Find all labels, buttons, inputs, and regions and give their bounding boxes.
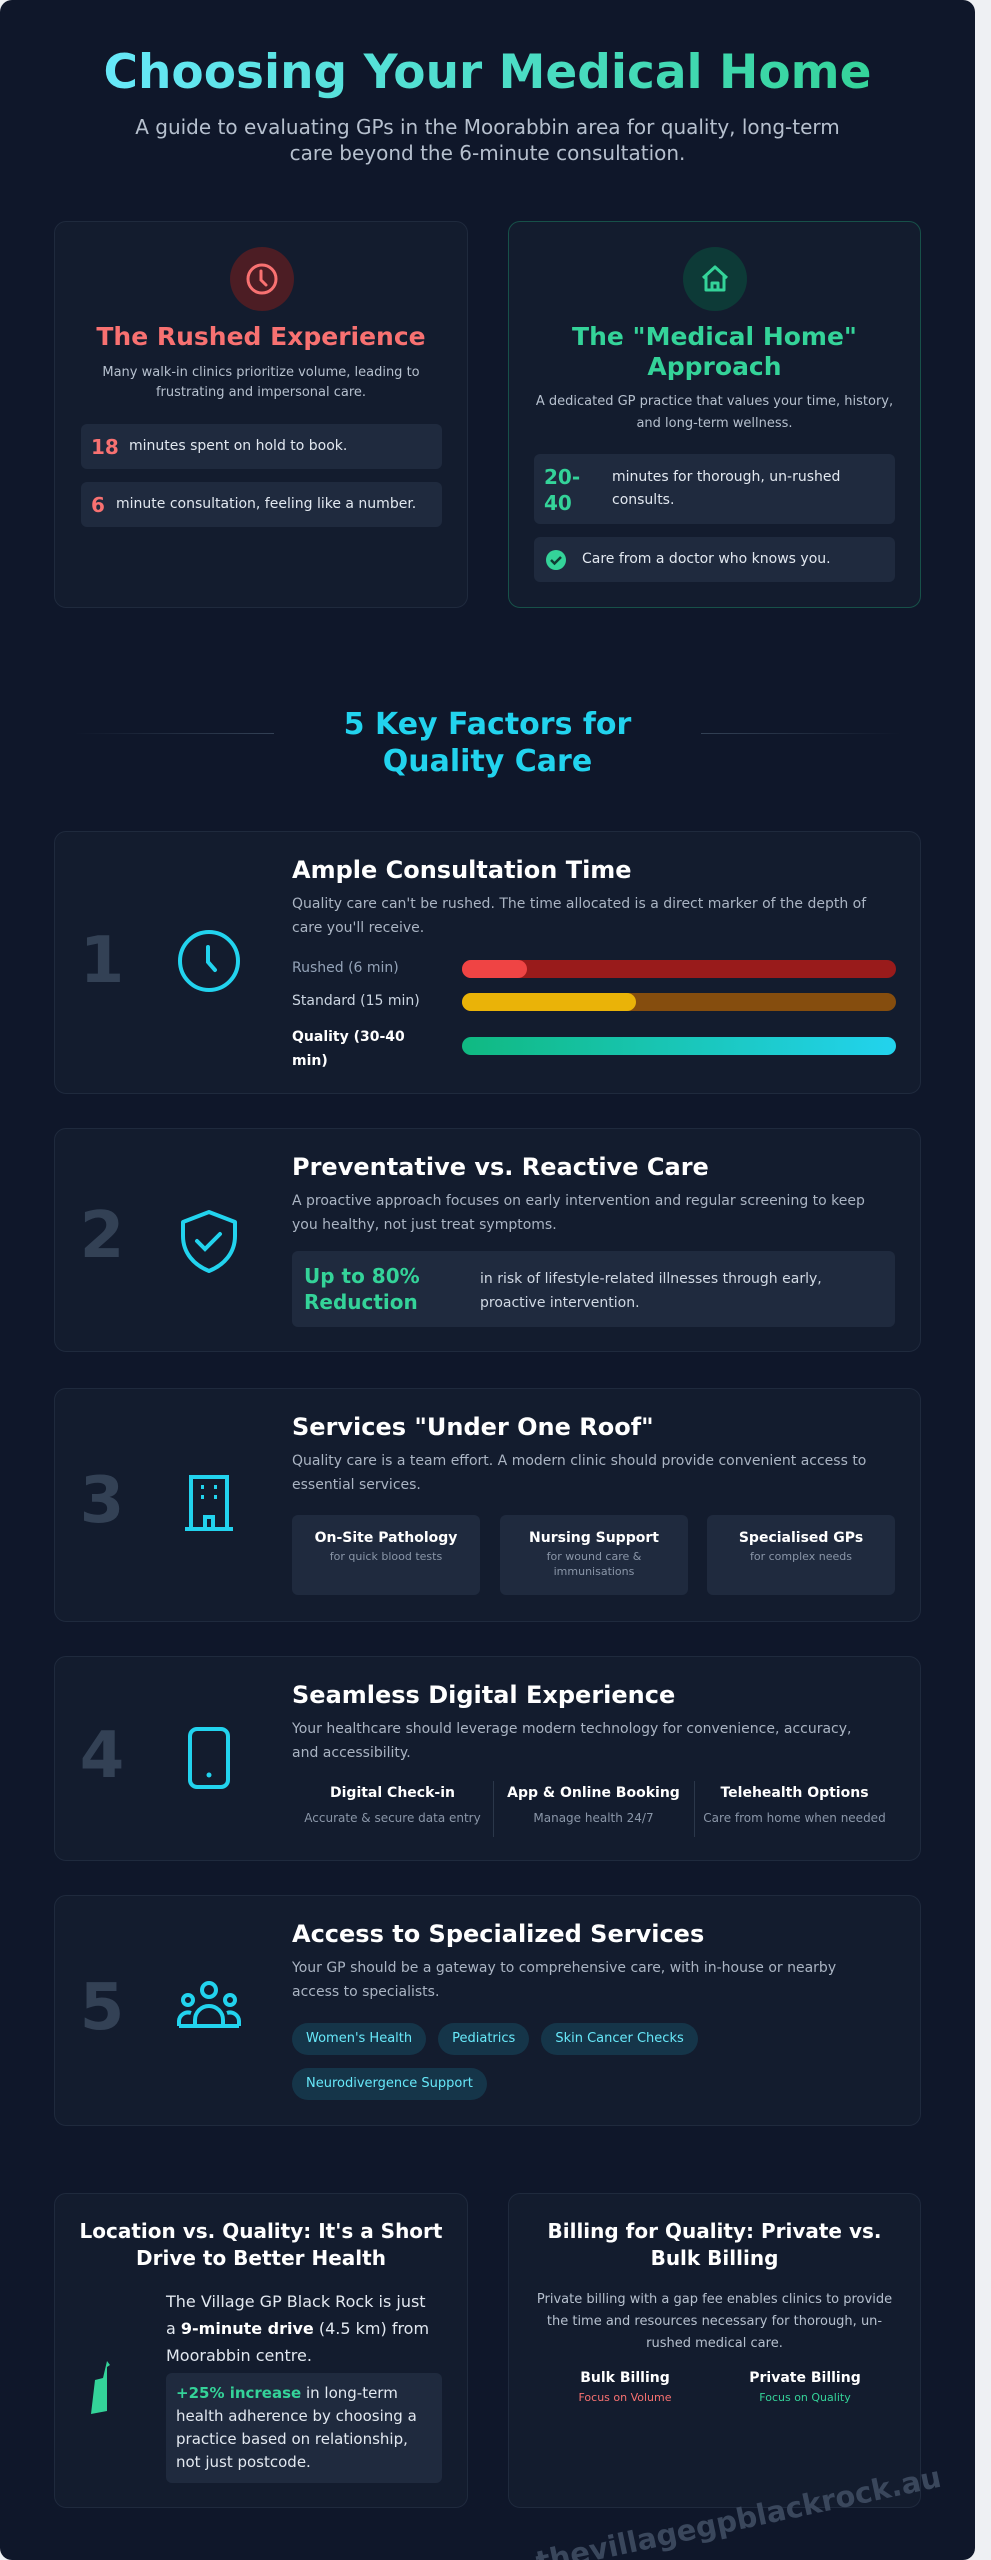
stat: 18 minutes: minutes spent on hold to book.: [129, 438, 347, 454]
title: Services "Under One Roof": [292, 1413, 654, 1441]
icon: people: [177, 1981, 241, 2028]
heading: Approach: [647, 352, 782, 381]
icon: green marker: [91, 2361, 110, 2414]
title: Access to Specialized Services: [292, 1920, 704, 1948]
bar chart: Quality (30-40 min): [292, 1029, 405, 1069]
heading: Location vs. Quality: It's a Short Drive to Better Health: [80, 2219, 442, 2270]
bar chart: Rushed (6 min): [292, 960, 399, 976]
bulk billing: Bulk Billing: [580, 2370, 670, 2386]
stat: 20-40: 40: [544, 491, 572, 515]
panel: factor 2: [54, 1128, 921, 1352]
tags: Pediatrics: [452, 2031, 515, 2046]
stat: 20-40: 20-: [544, 465, 580, 489]
panel: location vs quality: [54, 2193, 468, 2508]
title: Choosing Your Medical Home: [103, 45, 872, 100]
section heading: 5 key factors: Quality Care: [383, 744, 592, 779]
service: pathology: [292, 1515, 480, 1595]
service: specialised GPs: [707, 1515, 895, 1595]
stat: 18 minutes: [81, 424, 442, 469]
title: Preventative vs. Reactive Care: [292, 1153, 709, 1181]
stat: 6 minute: minute consultation, feeling like a number.: [116, 496, 416, 512]
description: Quality care is a team effort. A modern clinic should provide convenient access to essential services.: [292, 1453, 866, 1493]
section heading: 5 key factors: [112, 707, 863, 779]
text: Private billing with a gap fee enables clinics to provide the time and resources necessary for thorough, un-rushed medical care.: [537, 2292, 892, 2351]
heading: The "Medical Home": [572, 322, 857, 351]
bar chart: Standard (15 min): [292, 993, 420, 1009]
icon: building: [185, 1475, 233, 1531]
heading: [572, 322, 857, 381]
callout: [166, 2373, 442, 2483]
stat: 6 minute: [81, 482, 442, 527]
stat box: 80% reduction: Up to 80%: [304, 1264, 420, 1288]
description: Your healthcare should leverage modern technology for convenience, accuracy, and accessibility.: [292, 1721, 852, 1761]
callout: +25% increase in long-term health adherence by choosing a practice based on relationship, not just postcode.: [176, 2384, 417, 2471]
number 4: 4: [80, 1719, 124, 1793]
icon: clock red: [230, 247, 294, 311]
number 5: 5: [80, 1971, 124, 2045]
digital features: [304, 1781, 886, 1837]
subtitle: A guide to evaluating GPs in the Moorabbin area for quality, long-term care beyond the 6-minute consultation.: [135, 115, 840, 165]
private billing: Private Billing: [749, 2370, 861, 2386]
service: specialised GPs: Specialised GPs: [739, 1530, 863, 1546]
stat: 20-40: minutes for thorough, un-rushed consults.: [612, 469, 840, 508]
stat: 20-40: [534, 454, 895, 524]
panel: medical home: [508, 221, 921, 608]
icon: clock: [178, 930, 240, 992]
tags: Skin Cancer Checks: [555, 2031, 684, 2046]
digital features: App & Online Booking: [507, 1785, 680, 1801]
stat: check: Care from a doctor who knows you.: [582, 551, 831, 567]
icon: house: [683, 247, 747, 311]
service: nursing: for wound care &: [547, 1550, 641, 1563]
text: The Village GP Black Rock is just a 9-minute drive (4.5 km) from Moorabbin centre.: [166, 2292, 429, 2365]
panel: rushed experience: [54, 221, 468, 608]
title: Seamless Digital Experience: [292, 1681, 675, 1709]
description: Quality care can't be rushed. The time allocated is a direct marker of the depth of care you'll receive.: [292, 896, 866, 936]
text: Many walk-in clinics prioritize volume, leading to frustrating and impersonal care.: [102, 365, 420, 400]
stat: 18 minutes: 18: [91, 435, 119, 459]
heading: The Rushed Experience: [96, 322, 426, 351]
digital features: Accurate & secure data entry: [304, 1811, 481, 1825]
bar chart: [292, 960, 896, 1069]
panel: factor 3: [54, 1388, 921, 1622]
stat box: 80% reduction: [292, 1251, 895, 1327]
bulk billing: Focus on Volume: [578, 2391, 672, 2404]
number 2: 2: [80, 1199, 124, 1273]
panel: factor 1: [54, 831, 921, 1094]
number 1: 1: [80, 924, 124, 998]
description: Your GP should be a gateway to comprehensive care, with in-house or nearby access to specialists.: [292, 1960, 836, 2000]
heading: Billing for Quality: Private vs. Bulk Billing: [548, 2219, 882, 2270]
tags: Women's Health: [306, 2031, 412, 2046]
bulk billing: [578, 2370, 672, 2404]
panel: billing: [508, 2193, 921, 2508]
section heading: 5 key factors: 5 Key Factors for: [344, 707, 631, 742]
digital features: Manage health 24/7: [533, 1811, 654, 1825]
stat box: 80% reduction: in risk of lifestyle-related illnesses through early, proactive intervention.: [480, 1271, 822, 1311]
panel: factor 4: [54, 1656, 921, 1861]
stat: check: [534, 537, 895, 582]
number 3: 3: [80, 1464, 124, 1538]
text: A dedicated GP practice that values your time, history, and long-term wellness.: [536, 394, 893, 431]
title: Ample Consultation Time: [292, 856, 632, 884]
digital features: Care from home when needed: [703, 1811, 886, 1825]
service: nursing: Nursing Support: [529, 1530, 659, 1546]
digital features: Digital Check-in: [330, 1785, 455, 1801]
private billing: Focus on Quality: [759, 2391, 851, 2404]
description: A proactive approach focuses on early intervention and regular screening to keep you healthy, not just treat symptoms.: [292, 1193, 865, 1233]
stat: 6 minute: 6: [91, 493, 105, 517]
service: nursing: immunisations: [554, 1565, 634, 1578]
service: pathology: On-Site Pathology: [315, 1530, 457, 1546]
private billing: [749, 2370, 861, 2404]
service: nursing: [500, 1515, 688, 1595]
digital features: Telehealth Options: [720, 1785, 869, 1801]
service: specialised GPs: for complex needs: [750, 1550, 852, 1563]
icon: phone: [188, 1727, 230, 1789]
stat box: 80% reduction: Reduction: [304, 1290, 418, 1314]
panel: factor 5: [54, 1895, 921, 2126]
tags: Neurodivergence Support: [306, 2076, 473, 2091]
icon: shield: [181, 1210, 237, 1273]
tags: [292, 2023, 698, 2100]
service: pathology: for quick blood tests: [330, 1550, 442, 1563]
